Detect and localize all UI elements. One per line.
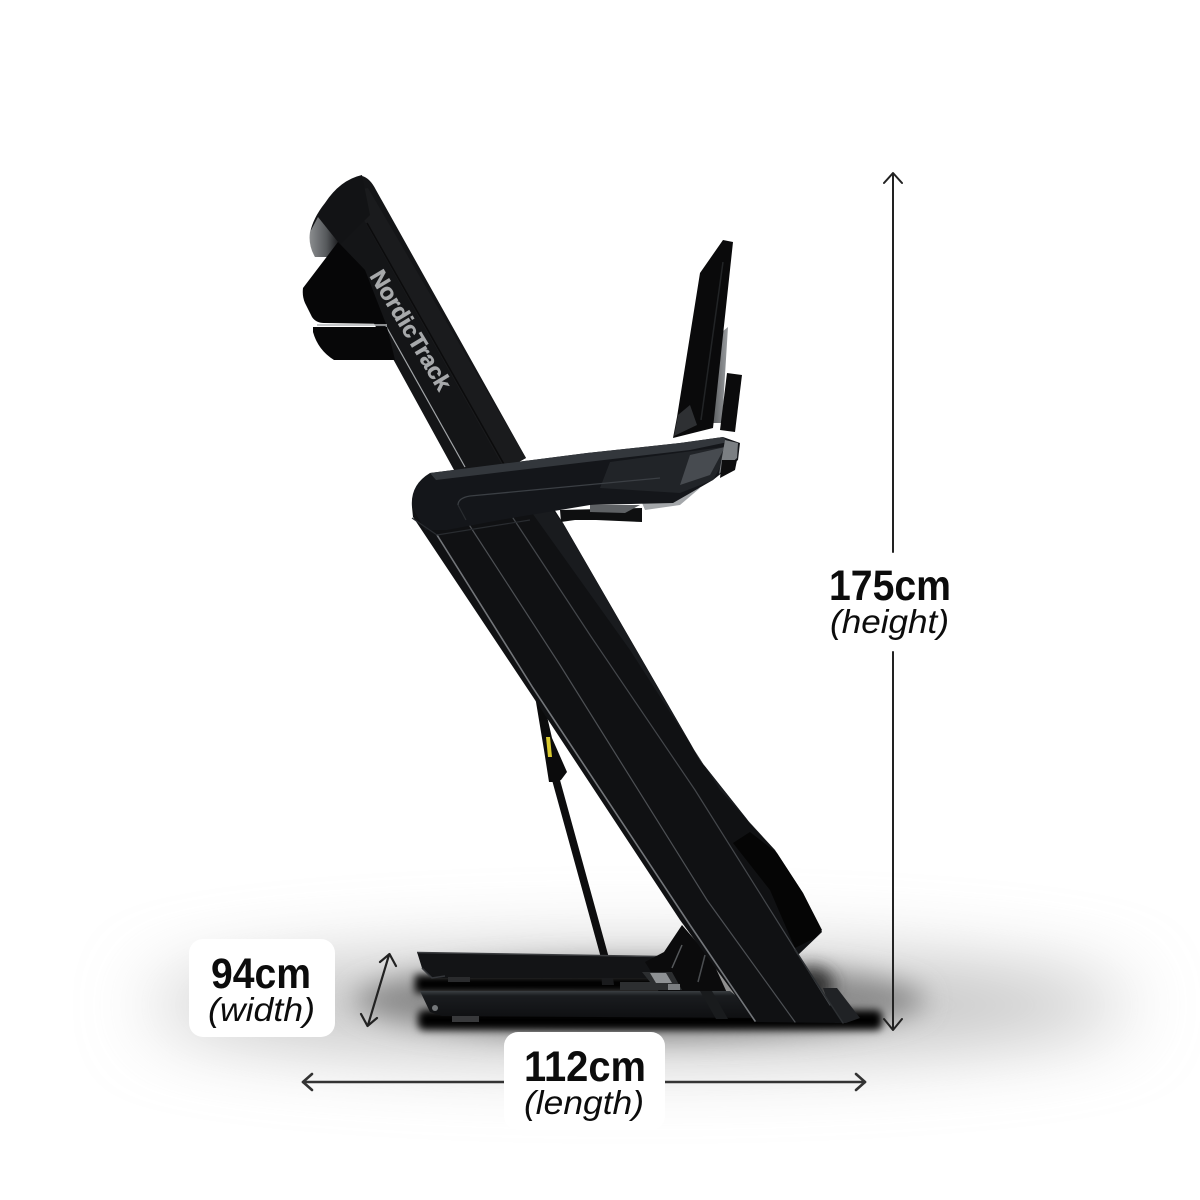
brand logo: NordicTrack (365, 265, 457, 395)
height label: (height) (830, 603, 949, 640)
end cap and black blocks (303, 175, 395, 360)
height label: 175cm (829, 562, 951, 610)
width label (189, 939, 335, 1037)
upper base rail (417, 952, 700, 982)
display screen (673, 240, 742, 438)
length label: (length) (524, 1084, 644, 1121)
lower base rail (420, 991, 765, 1022)
upper deck (325, 176, 526, 490)
height arrow (884, 173, 902, 1030)
folded treadmill (303, 175, 860, 1023)
length label: 112cm (524, 1043, 646, 1091)
width label: (width) (208, 991, 315, 1028)
width arrow (361, 954, 396, 1026)
rear foot (823, 988, 860, 1023)
main lower frame (412, 495, 843, 1023)
width label: 94cm (211, 950, 311, 998)
hinge bracket and metal parts (620, 925, 728, 995)
floor shadow (150, 957, 1130, 1053)
under-rail console parts (560, 488, 700, 522)
length label (504, 1032, 665, 1130)
frame highlight lines (437, 518, 843, 1023)
length arrow (303, 1074, 865, 1090)
handrail (412, 437, 740, 535)
gas strut (534, 690, 614, 985)
motor hood (733, 832, 822, 948)
height label (829, 562, 951, 640)
